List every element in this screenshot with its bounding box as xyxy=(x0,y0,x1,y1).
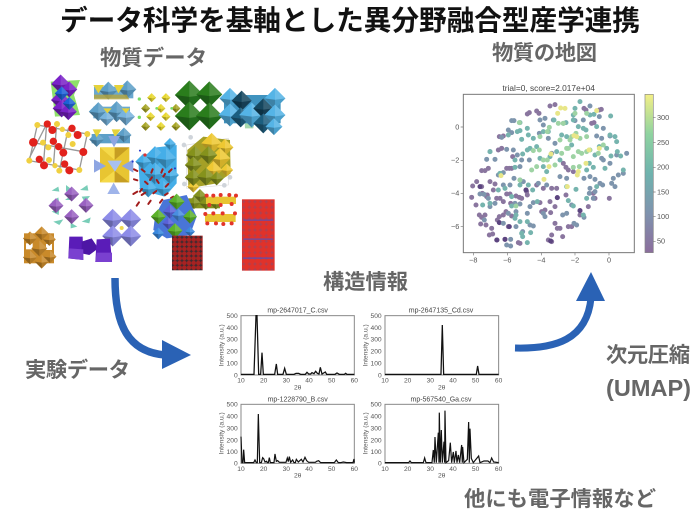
XRD panel: mp-2647017_C: 2θ xyxy=(294,384,302,391)
crystal structures collage xyxy=(23,74,285,271)
XRD panel: mp-567540_Ga: 40 xyxy=(449,466,457,473)
XRD panel: mp-2647135_Cd: 500 xyxy=(371,313,382,320)
XRD panel: mp-567540_Ga: 400 xyxy=(371,414,382,421)
XRD panel: mp-567540_Ga: 50 xyxy=(472,466,480,473)
label: dimensionality reduction: 次元圧縮 xyxy=(606,343,690,367)
y axis labels xyxy=(451,122,459,231)
x axis labels: −8 xyxy=(469,256,478,265)
heading: structural information: 構造情報 xyxy=(323,270,408,294)
XRD panel: mp-2647135_Cd: 60 xyxy=(495,378,503,385)
XRD panel: mp-1228790_B: Intensity (a.u.) xyxy=(219,412,226,454)
XRD panel: mp-1228790_B: 50 xyxy=(328,466,336,473)
crystal: lavender octahedra xyxy=(102,209,141,246)
XRD panel: mp-1228790_B: 300 xyxy=(227,425,238,432)
XRD panel: mp-2647135_Cd: 40 xyxy=(449,378,457,385)
arrow: crystal data to XRD patterns xyxy=(115,278,191,369)
scatter points xyxy=(472,102,627,246)
XRD panel: mp-2647135_Cd: 50 xyxy=(472,378,480,385)
XRD panel: mp-2647017_C: 10 xyxy=(237,378,245,385)
XRD panel: mp-567540_Ga: 100 xyxy=(371,449,382,456)
XRD panel: mp-1228790_B: 60 xyxy=(351,466,358,473)
colorbar: 50 xyxy=(657,237,665,246)
x axis labels: −6 xyxy=(503,256,512,265)
XRD panel: mp-2647135_Cd: 30 xyxy=(427,378,434,385)
y axis labels: 0 xyxy=(455,122,459,131)
y axis labels: −6 xyxy=(451,222,459,231)
XRD panel: mp-2647017_C: 300 xyxy=(227,337,238,344)
crystal: blue polyhedra with red rods xyxy=(132,138,179,206)
colorbar: 300 xyxy=(657,113,669,122)
XRD panel: mp-1228790_B: 400 xyxy=(227,414,238,421)
XRD panel: mp-2647135_Cd xyxy=(363,308,503,391)
XRD panel: mp-2647135_Cd: 400 xyxy=(371,325,382,332)
XRD panel: mp-567540_Ga: 300 xyxy=(371,425,382,432)
x axis labels: −2 xyxy=(571,256,579,265)
colorbar: 100 xyxy=(657,212,669,221)
label: UMAP: (UMAP) xyxy=(606,375,691,401)
XRD panel: mp-2647017_C: 40 xyxy=(305,378,313,385)
crystal: red and yellow ball and stick xyxy=(26,120,90,174)
XRD panel: mp-2647017_C: 500 xyxy=(227,313,238,320)
XRD panel: mp-1228790_B: mp-1228790_B.csv xyxy=(268,396,328,403)
XRD panel: mp-1228790_B: 10 xyxy=(237,466,245,473)
tick marks xyxy=(461,127,609,255)
y axis labels: −4 xyxy=(451,189,459,198)
XRD panel: mp-567540_Ga: Intensity (a.u.) xyxy=(363,412,370,454)
XRD panel: mp-2647135_Cd: 300 xyxy=(371,337,382,344)
crystal: small yellow and green xyxy=(138,93,180,131)
XRD panel: mp-2647017_C: mp-2647017_C.csv xyxy=(267,308,328,315)
XRD panel: mp-567540_Ga: 20 xyxy=(404,466,412,473)
crystal: red and yellow chains xyxy=(203,193,238,226)
XRD panel: mp-2647017_C: 400 xyxy=(227,325,238,332)
label: experimental data: 実験データ xyxy=(25,357,130,382)
crystal: deep purple xyxy=(68,237,112,262)
chart title: trial=0, score=2.017e+04 xyxy=(502,83,595,93)
XRD panel: mp-2647017_C: 60 xyxy=(351,378,358,385)
XRD panel: mp-2647135_Cd: 200 xyxy=(371,349,382,356)
XRD panel: mp-567540_Ga: 2θ xyxy=(438,473,446,480)
title: データ科学を基軸とした異分野融合型産学連携 xyxy=(60,5,640,36)
XRD panel: mp-1228790_B: 500 xyxy=(227,402,238,409)
XRD panel: mp-567540_Ga: 10 xyxy=(381,466,389,473)
XRD panel: mp-567540_Ga: mp-567540_Ga.csv xyxy=(411,396,472,403)
crystal: teal and violet xyxy=(48,185,93,228)
crystal: dark red cube xyxy=(172,236,203,270)
XRD panel: mp-2647017_C: 30 xyxy=(283,378,290,385)
colorbar: 250 xyxy=(657,138,669,147)
crystal: sky blue framework xyxy=(218,88,285,135)
x axis labels: −4 xyxy=(537,256,546,265)
XRD panel: mp-2647017_C: 100 xyxy=(227,360,238,367)
XRD panel: mp-2647135_Cd: 2θ xyxy=(438,384,446,391)
XRD panel: mp-2647017_C: 50 xyxy=(328,378,336,385)
XRD panel: mp-2647017_C: 200 xyxy=(227,349,238,356)
XRD panel: mp-2647135_Cd: 10 xyxy=(381,378,389,385)
crystal: blue and yellow layers xyxy=(89,80,136,147)
XRD panel: mp-567540_Ga xyxy=(363,396,503,480)
heading: material data: 物質データ xyxy=(100,45,207,70)
colorbar xyxy=(645,94,669,253)
crystal: dark green octahedra xyxy=(175,80,223,130)
y axis labels: −2 xyxy=(451,156,459,165)
XRD panel: mp-2647135_Cd: mp-2647135_Cd.csv xyxy=(409,308,474,315)
crystal: purple and green xyxy=(51,74,80,120)
XRD panel: mp-2647135_Cd: Intensity (a.u.) xyxy=(363,324,370,366)
XRD panel: mp-2647135_Cd: 0 xyxy=(378,372,382,379)
XRD panel: mp-2647135_Cd: 100 xyxy=(371,360,382,367)
XRD panel: mp-567540_Ga: 500 xyxy=(371,402,382,409)
arrow: XRD patterns to materials map xyxy=(515,272,605,348)
crystal: tall red column xyxy=(242,199,275,271)
crystal: bronze xyxy=(23,226,56,269)
x axis labels: 0 xyxy=(607,256,611,265)
colorbar: 200 xyxy=(657,163,669,172)
XRD panel: mp-1228790_B: 100 xyxy=(227,449,238,456)
XRD panel: mp-1228790_B: 0 xyxy=(234,461,238,468)
crystal: olive and gold xyxy=(182,133,233,210)
XRD panel: mp-2647135_Cd: 20 xyxy=(404,378,412,385)
crystal: green and blue complex xyxy=(151,194,197,239)
XRD panel: mp-1228790_B: 2θ xyxy=(294,473,302,480)
XRD panel: mp-2647017_C: 0 xyxy=(234,372,238,379)
XRD patterns: four panels xyxy=(219,308,503,480)
XRD panel: mp-2647017_C: 20 xyxy=(260,378,268,385)
plot frame xyxy=(463,94,634,253)
XRD panel: mp-1228790_B: 20 xyxy=(260,466,268,473)
crystal: yellow and periwinkle xyxy=(94,136,133,194)
XRD panel: mp-1228790_B: 30 xyxy=(283,466,290,473)
XRD panel: mp-567540_Ga: 60 xyxy=(495,466,503,473)
XRD panel: mp-567540_Ga: 30 xyxy=(427,466,434,473)
heading: map of materials: 物質の地図 xyxy=(492,41,597,65)
XRD panel: mp-2647017_C: Intensity (a.u.) xyxy=(219,324,226,366)
x axis labels xyxy=(469,256,611,265)
label: other electronic information: 他にも電子情報など xyxy=(464,487,656,511)
XRD panel: mp-1228790_B xyxy=(219,396,358,480)
XRD panel: mp-567540_Ga: 0 xyxy=(378,461,382,468)
scatter chart: UMAP map xyxy=(451,83,669,265)
XRD panel: mp-1228790_B: 200 xyxy=(227,437,238,444)
colorbar: 150 xyxy=(657,187,669,196)
XRD panel: mp-2647017_C xyxy=(219,308,358,391)
XRD panel: mp-567540_Ga: 200 xyxy=(371,437,382,444)
XRD panel: mp-1228790_B: 40 xyxy=(305,466,313,473)
